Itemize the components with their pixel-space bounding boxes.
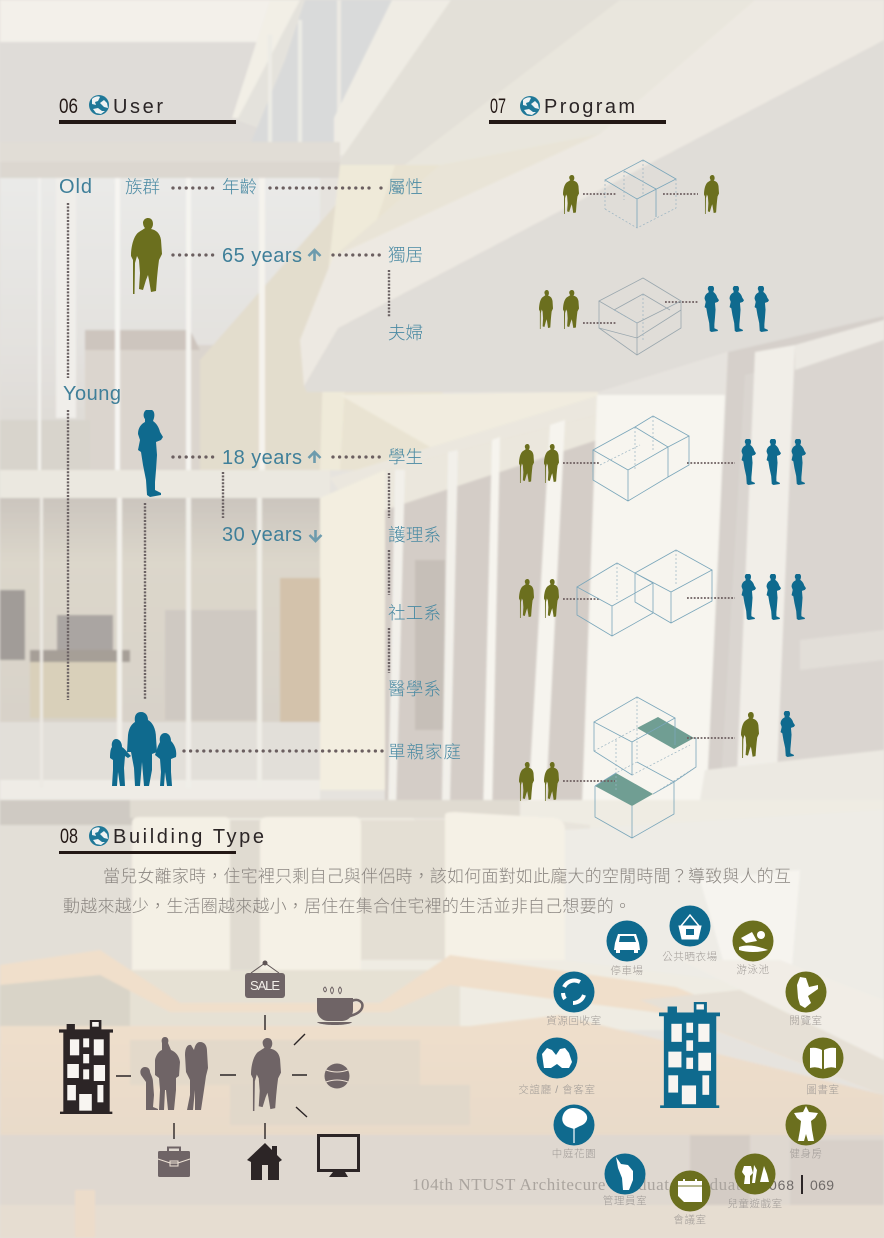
facility: courtyard garden: [552, 1104, 596, 1160]
young person row: 醫學系: [388, 679, 441, 699]
paragraph: 動越來越少，生活圈越來越小，居住在集合住宅裡的生活並非自己想要的。: [63, 897, 631, 916]
facility: courtyard garden: 中庭花園: [552, 1147, 596, 1160]
icon: monitor: [318, 1136, 358, 1177]
young person row: 護理系: [388, 525, 441, 545]
program row 5: shared floors: [519, 697, 795, 838]
footer: page caption: 069: [810, 1177, 834, 1193]
facility: lounge: 交誼廳 / 會客室: [518, 1083, 596, 1096]
icon: ball: [324, 1064, 350, 1088]
family row: 單親家庭: [388, 742, 461, 762]
heading: 08 Building Type: 08: [60, 825, 78, 848]
header row labels: [59, 176, 423, 198]
old person row: [131, 218, 423, 343]
diagram: daily life network: [59, 960, 362, 1180]
facility: gym: 健身房: [789, 1147, 823, 1160]
icon: sale sign: SALE: [250, 978, 280, 993]
diagram: facilities ring: [518, 906, 844, 1226]
old person row: 65 years: [222, 245, 302, 267]
old person row: 夫婦: [388, 323, 423, 343]
heading: 07 Program: Program: [544, 96, 635, 118]
facility: library: [802, 1038, 844, 1096]
icon: briefcase: [158, 1148, 190, 1177]
young person row: 30 years: [222, 524, 302, 546]
program row 3: [519, 416, 806, 501]
young person row: 社工系: [388, 603, 441, 623]
header row labels: Old: [59, 176, 92, 198]
facility: meeting room: 會議室: [673, 1213, 707, 1226]
header row labels: 屬性: [388, 177, 423, 197]
facility: recycling room: 資源回收室: [546, 1014, 602, 1027]
facility: children playroom: [727, 1154, 783, 1210]
facility: meeting room: [670, 1170, 710, 1226]
icon: family silhouettes: [140, 1037, 208, 1110]
facility: reading room: 閱覽室: [789, 1014, 823, 1027]
connecting lines: [116, 1015, 307, 1139]
program row 2: couple and students: [539, 278, 769, 355]
header row labels: 族群: [125, 177, 160, 197]
facility: lounge: [518, 1038, 596, 1096]
facility: library: 圖書室: [806, 1083, 840, 1096]
heading: 07 Program: 07: [490, 95, 506, 118]
icon: apartment building: [59, 1020, 113, 1114]
icon: house: [247, 1143, 282, 1180]
young person row: 18 years: [222, 447, 302, 469]
program row 1: single elderly: [563, 160, 719, 228]
old person row: 獨居: [388, 245, 423, 265]
heading: 06 User: User: [113, 96, 163, 118]
program row 4: [519, 550, 806, 636]
young label and left axis: Young: [63, 383, 121, 405]
heading: 06 User: 06: [59, 95, 78, 118]
icon: coffee cup: [317, 987, 362, 1025]
footer: page caption: 068: [769, 1177, 794, 1193]
facility: children playroom: 兒童遊戲室: [727, 1197, 783, 1210]
heading: 08 Building Type: Building Type: [113, 826, 264, 848]
paragraph: [63, 867, 791, 916]
facility: gym: [786, 1104, 826, 1160]
family row: [110, 712, 461, 786]
panel: program diagrams: [519, 160, 806, 838]
heading: 07 Program: [489, 95, 666, 124]
header row labels: 年齡: [222, 177, 257, 197]
icon: blue building: [659, 1002, 720, 1108]
facility: manager room: [603, 1154, 647, 1207]
heading: 06 User: [59, 95, 236, 124]
facility: recycling room: [546, 972, 602, 1027]
footer: page caption: 104th NTUST Architecure Graduate Graduation: [412, 1175, 764, 1194]
facility: parking: 停車場: [610, 964, 644, 977]
icon: sale sign: [245, 960, 285, 998]
panel: user age chart: [59, 176, 461, 786]
facility: parking: [606, 920, 648, 977]
paragraph: 當兒女離家時，住宅裡只剩自己與伴侶時，該如何面對如此龐大的空閒時間？導致與人的互: [103, 867, 791, 886]
facility: laundry yard: [662, 906, 718, 963]
icon: elderly person: [251, 1038, 281, 1111]
facility: manager room: 管理員室: [603, 1194, 647, 1207]
facility: reading room: [786, 972, 826, 1027]
heading: 08 Building Type: [59, 825, 264, 854]
facility: swimming pool: [732, 920, 774, 976]
young person row: [138, 410, 441, 700]
facility: swimming pool: 游泳池: [736, 964, 770, 976]
facility: laundry yard: 公共晒衣場: [662, 951, 718, 963]
young person row: 學生: [388, 447, 423, 467]
